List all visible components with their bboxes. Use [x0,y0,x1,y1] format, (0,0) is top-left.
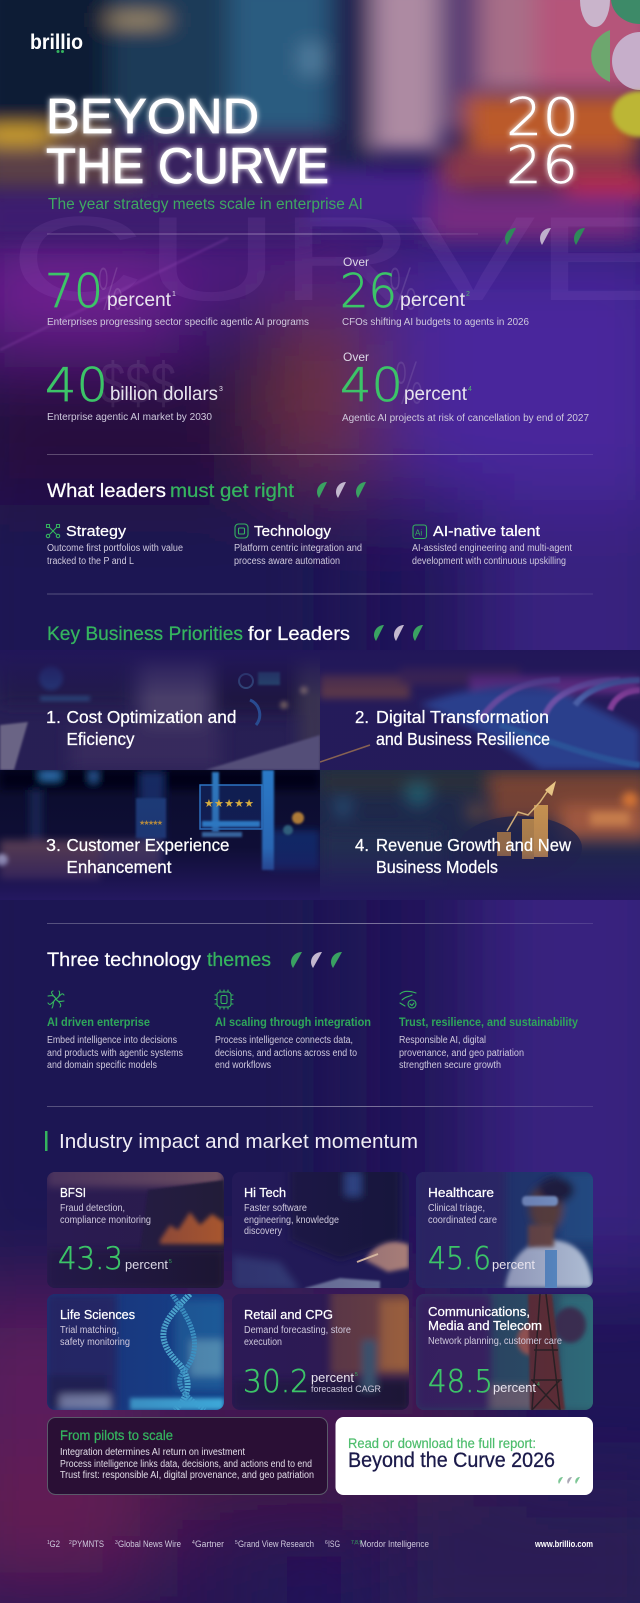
panel: priority 3: 3. [46,835,61,855]
heading: key business priorities [48,626,350,644]
block: technology: Technology [254,524,332,540]
card: Healthcare: coordinated care [428,1215,497,1226]
card: Communications, Media and Telecom: 4 [537,1382,540,1388]
card: Communications, Media and Telecom: Network planning, customer care [428,1336,562,1347]
card: Retail and CPG: percent [311,1371,355,1385]
card: Hi Tech: engineering, knowledge [244,1215,339,1226]
card: Retail and CPG: 5 [355,1372,358,1378]
stat: over 26 percent: Over [343,255,369,269]
footnotes: 6 [325,1540,328,1546]
block: trust, resilience, sustainability: provenance, and geo patriation [399,1048,524,1059]
footnotes: 4 [192,1540,195,1546]
footnotes: Gartner [195,1539,224,1549]
block: trust, resilience, sustainability: strengthen secure growth [399,1060,501,1071]
heading: what leaders must get right: must get right [170,480,295,502]
panel: priority 2: and Business Resilience [376,729,550,749]
block: AI driven enterprise: AI driven enterprise [47,1015,150,1029]
card: Communications, Media and Telecom: Media and Telecom [428,1318,542,1333]
card: Hi Tech [232,1165,409,1290]
stat: over 40 percent: percent [404,384,468,405]
footnotes: PYMNTS [72,1539,104,1549]
stat: 40 billion dollars: $$$ [100,351,176,416]
card: Retail and CPG: 30.2 [243,1364,309,1400]
callout: from pilots to scale: Process intelligence links data, decisions, and actions end to end [60,1459,312,1470]
year 2026: 20 [506,88,579,148]
block: strategy: Outcome first portfolios with value [47,543,183,554]
stat: over 40 percent: 40 [340,358,403,412]
icon: handshake check [400,991,416,1008]
panel: priority 3: ★★★★★ [139,819,163,827]
callout: from pilots to scale: From pilots to scale [60,1428,173,1443]
block: AI driven enterprise: and domain specific models [47,1060,157,1071]
ghost word: CURVE: CURVE [10,192,640,326]
card: Communications, Media and Telecom: 48.5 [428,1364,493,1400]
card: Hi Tech: Faster software [244,1203,307,1214]
icon: swirl [48,991,64,1008]
block: trust, resilience, sustainability: Responsible AI, digital [399,1035,486,1046]
stat: over 40 percent: Agentic AI projects at risk of cancellation by end of 2027 [342,413,589,424]
title: BEYOND [46,90,259,144]
stat: 40 billion dollars: 3 [219,386,223,393]
callout: read or download: Beyond the Curve 2026 [348,1449,555,1472]
panel: priority 1: Cost Optimization and [66,707,236,727]
card: Retail and CPG: forecasted CAGR [311,1384,381,1394]
stat: 40 billion dollars [47,360,223,422]
title: THE CURVE [46,138,329,194]
panel: priority 4: Business Models [376,857,498,877]
icon: AI badge: Ai [415,528,422,538]
stat: 70 percent: 70 [45,264,103,318]
card: Communications, Media and Telecom [416,1294,600,1410]
card: Retail and CPG [232,1290,415,1410]
footnotes: 1 [47,1540,50,1546]
card: Hi Tech: Hi Tech [244,1185,286,1200]
card: Healthcare: Clinical triage, [428,1203,485,1214]
card: Healthcare [416,1165,600,1290]
block: technology: process aware automation [234,556,340,567]
footnotes: Mordor Intelligence [360,1539,429,1549]
block: AI-native talent: AI-native talent [433,524,540,540]
icon: processor [215,990,233,1009]
logo: brillio: brillio [30,31,83,54]
panel: priority 1: 1. [46,707,61,727]
callout: from pilots to scale [48,1418,328,1494]
diagonal light streak [0,238,228,350]
heading: what leaders must get right [46,482,294,502]
block: AI driven enterprise: and products with agentic systems [47,1048,183,1059]
block: AI scaling through integration: decisions, and actions across end to [215,1048,357,1059]
stat: 70 percent: Enterprises progressing sector specific agentic AI programs [47,317,309,328]
block: strategy [46,524,183,567]
block: AI-native talent: AI-assisted engineering and multi-agent [412,543,572,554]
panel: priority 3: Enhancement [66,857,172,877]
website url: www.brillio.com [534,1539,593,1549]
card: Life Sciences: safety monitoring [60,1337,130,1348]
footnotes: 7,8,9 [351,1540,362,1546]
card: Life Sciences: Life Sciences [60,1307,135,1322]
panel: priority 2: Digital Transformation [376,707,549,727]
card: BFSI: percent [125,1258,169,1272]
stat: over 26 percent: percent [400,290,466,311]
block: AI-native talent [412,524,572,567]
stat: over 40 percent [340,350,589,424]
card: Life Sciences [47,1294,224,1410]
panel: priority 1 [0,650,330,770]
footnotes: 2 [69,1540,72,1546]
heading: three technology themes [47,952,270,970]
card: Communications, Media and Telecom: Communications, [428,1304,530,1319]
year 2026 [506,92,578,188]
heading: three technology themes: themes [207,949,271,971]
stat: 40 billion dollars: billion dollars [110,384,218,405]
stat: 40 billion dollars: 40 [45,358,108,412]
stat: over 26 percent: 2 [466,291,470,298]
icon: AI badge [413,525,426,538]
callout: from pilots to scale: Integration determines AI return on investment [60,1447,245,1458]
icon: three petals [317,482,366,498]
icon: three petals [374,625,423,641]
panel: priority 4: 4. [355,835,369,855]
block: AI driven enterprise: Embed intelligence into decisions [47,1035,177,1046]
stat: over 40 percent: % [394,352,424,417]
card: BFSI: Fraud detection, [60,1203,125,1214]
card: BFSI: compliance monitoring [60,1215,151,1226]
heading: key business priorities: for Leaders [248,623,350,645]
block: AI scaling through integration: end workflows [215,1060,271,1071]
card: Retail and CPG: execution [244,1337,282,1348]
panel: priority 2 [320,650,640,770]
stat: 70 percent: 1 [172,291,176,298]
stat: 40 billion dollars: Enterprise agentic AI market by 2030 [47,412,212,423]
title [46,90,329,194]
panel: priority 4 [320,770,640,900]
block: technology [234,524,362,567]
block: AI driven enterprise [47,991,183,1071]
footnotes: 3 [115,1540,118,1546]
panel: priority 3: Customer Experience [66,835,230,855]
card: BFSI: 43.3 [58,1241,123,1277]
block: AI scaling through integration: Process intelligence connects data, [215,1035,353,1046]
card: Communications, Media and Telecom: percent [493,1381,537,1395]
block: trust, resilience, sustainability [399,991,578,1071]
icon: strategy nodes [46,524,60,538]
footnotes: ISG [328,1539,340,1549]
card: Life Sciences: Trial matching, [60,1325,119,1336]
block: AI-native talent: development with continuous upskilling [412,556,566,567]
heading: industry impact: Industry impact and market momentum [59,1131,418,1153]
stat: over 26 percent: CFOs shifting AI budgets to agents in 2026 [342,317,529,328]
year 2026: 26 [506,136,578,196]
icon: three petals [291,952,342,968]
footnotes: 5 [235,1540,238,1546]
callout: read or download: Read or download the full report: [348,1436,536,1451]
icon: chip [235,524,248,538]
footnotes: G2 [50,1539,60,1549]
callout: from pilots to scale: Trust first: responsible AI, digital provenance, and geo patriation [60,1470,314,1481]
stat: 70 percent: percent [107,290,172,311]
heading: three technology themes: Three technology [47,949,201,971]
card: Healthcare: 45.6 [428,1241,491,1277]
card: Hi Tech: discovery [244,1226,282,1237]
stat: 70 percent [48,268,309,327]
stat: over 40 percent: Over [343,350,369,364]
card: Retail and CPG: Demand forecasting, store [244,1325,351,1336]
panel: priority 1: Eficiency [66,729,135,749]
block: trust, resilience, sustainability: Trust, resilience, and sustainability [399,1015,578,1029]
card: Retail and CPG: Retail and CPG [244,1307,333,1322]
callout: read or download [336,1417,593,1495]
icon: small petals [558,1477,580,1484]
stat: over 40 percent: 4 [468,386,472,393]
icon: bokeh half circles top right [580,0,640,137]
panel: priority 2: 2. [355,707,369,727]
stat: over 26 percent [340,255,529,328]
card: BFSI: BFSI [60,1185,86,1200]
block: technology: Platform centric integration and [234,543,362,554]
block: AI scaling through integration [215,990,371,1071]
card: Healthcare: Healthcare [428,1185,494,1200]
card: BFSI: 5 [169,1259,172,1265]
subtitle: The year strategy meets scale in enterprise AI [48,196,363,213]
stat: 70 percent: % [97,258,124,323]
icon: gold stars: ★★★★★ [204,798,254,810]
block: strategy: tracked to the P and L [47,556,134,567]
block: strategy: Strategy [66,524,127,540]
block: AI scaling through integration: AI scaling through integration [215,1015,371,1029]
stat: over 26 percent: 26 [340,264,397,318]
card: BFSI [47,1165,224,1290]
icon: three petals [505,228,585,245]
footnotes: Global News Wire [118,1539,181,1549]
panel: priority 3 [0,770,320,900]
stat: over 26 percent: % [388,258,418,323]
heading: key business priorities: Key Business Priorities [47,623,243,645]
panel: priority 4: Revenue Growth and New [376,835,571,855]
heading: what leaders must get right: What leaders [47,480,166,502]
card: Healthcare: percent [492,1258,536,1272]
footnotes: Grand View Research [238,1539,314,1549]
footnotes [47,1539,429,1549]
chart: rising gold bars [497,781,556,859]
